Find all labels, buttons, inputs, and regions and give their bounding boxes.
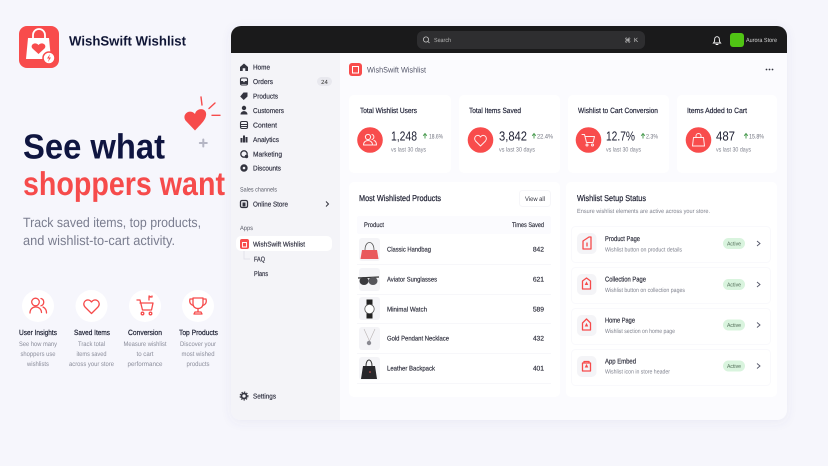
- panel: most wishlisted products: Most Wishlisted Products: [359, 193, 441, 203]
- button: view all: [520, 190, 550, 206]
- row: classic handbag: [359, 238, 544, 261]
- status row: collection page: Active: [727, 282, 741, 288]
- table header: Times Saved: [512, 222, 544, 229]
- panel: wishlist setup status: Wishlist Setup Status: [577, 193, 646, 203]
- panel: most wishlisted products: [349, 182, 560, 397]
- status row: home page: Active: [727, 322, 741, 329]
- button: view all: View all: [525, 196, 545, 203]
- icon: shopping bag with heart: [19, 26, 59, 68]
- feature: user insights: wishlists: [26, 361, 50, 368]
- app name: WishSwift Wishlist: [69, 34, 186, 48]
- search field: [417, 31, 645, 49]
- feature: user insights: [19, 290, 58, 368]
- search field: K: [634, 37, 638, 44]
- nav: marketing: Marketing: [253, 150, 282, 158]
- row: aviator sunglasses: [358, 268, 544, 291]
- nav: products: Products: [253, 92, 278, 100]
- feature: user insights: See how many: [19, 341, 58, 348]
- more menu: [766, 69, 773, 70]
- store name: Aurora Store: [746, 37, 778, 44]
- headline: shoppers want: [23, 165, 225, 202]
- status row: collection page: Collection Page: [605, 276, 646, 284]
- row: classic handbag: 842: [533, 246, 544, 254]
- feature: saved items: Saved Items: [74, 328, 110, 337]
- feature: user insights: shoppers use: [20, 351, 56, 358]
- feature: user insights: User Insights: [19, 328, 57, 337]
- badge: orders count: 24: [321, 79, 328, 86]
- row: aviator sunglasses: 621: [533, 276, 544, 284]
- status row: product page: Wishlist button on product details: [605, 246, 682, 254]
- subheading: and wishlist-to-cart activity.: [23, 233, 175, 248]
- nav: marketing: [241, 150, 282, 158]
- label: sales channels: Sales channels: [240, 186, 277, 194]
- feature: saved items: items saved: [76, 351, 107, 358]
- nav: online store: Online Store: [253, 200, 288, 208]
- badge: orders count: [317, 77, 332, 86]
- icon: users: [30, 298, 46, 313]
- store avatar: [730, 33, 744, 47]
- stat card: items added to cart: Items Added to Cart: [687, 106, 748, 115]
- nav: analytics: [240, 136, 279, 144]
- stat card: items added to cart: 487: [716, 128, 735, 144]
- row: minimal watch: Minimal Watch: [387, 306, 427, 314]
- status row: product page: Active: [727, 240, 741, 248]
- table header: [357, 216, 551, 234]
- row: gold pendant necklace: Gold Pendant Necklace: [387, 336, 449, 342]
- headline: See what: [23, 128, 165, 166]
- row: leather backpack: 401: [533, 366, 544, 372]
- feature: top products: Top Products: [179, 328, 218, 337]
- status row: collection page: [572, 268, 770, 304]
- status row: collection page: Wishlist button on collection pages: [605, 287, 685, 294]
- stat card: wishlist to cart conversion: [568, 95, 669, 173]
- feature: top products: [179, 290, 218, 368]
- panel: wishlist setup status: Ensure wishlist elements are active across your store.: [577, 208, 710, 215]
- subheading: Track saved items, top products,: [23, 215, 201, 230]
- nav: products: [240, 92, 278, 100]
- row: classic handbag: Classic Handbag: [387, 246, 431, 254]
- stat card: total items saved: [459, 95, 560, 173]
- nav: analytics: Analytics: [253, 136, 279, 144]
- status row: home page: [572, 308, 770, 344]
- feature: conversion: [124, 290, 167, 368]
- sidebar: [231, 53, 340, 420]
- nav: plans: Plans: [254, 270, 268, 278]
- row: gold pendant necklace: [359, 327, 544, 350]
- nav: settings: Settings: [253, 392, 276, 400]
- stat card: total wishlist users: vs last 30 days: [391, 146, 426, 154]
- feature: conversion: performance: [128, 361, 163, 368]
- status row: product page: [572, 226, 770, 262]
- nav: discounts: Discounts: [253, 164, 281, 172]
- stat card: wishlist to cart conversion: Wishlist to Cart Conversion: [578, 106, 658, 115]
- nav: orders: Orders: [253, 78, 273, 86]
- nav: online store: [240, 200, 328, 208]
- status row: home page: Wishlist section on home page: [605, 328, 676, 335]
- status row: home page: Home Page: [605, 318, 635, 324]
- nav: content: [240, 122, 277, 130]
- nav: active app wishswift wishlist: [236, 236, 332, 251]
- feature: top products: most wished: [182, 351, 215, 358]
- search field: Search: [434, 37, 451, 44]
- row: leather backpack: Leather Backpack: [387, 366, 436, 372]
- stat card: total wishlist users: 18.6%: [429, 134, 443, 140]
- stat card: items added to cart: 15.8%: [749, 134, 764, 140]
- headline: [23, 128, 225, 202]
- stat card: total items saved: 22.4%: [537, 134, 553, 140]
- stat card: wishlist to cart conversion: 12.7%: [606, 128, 635, 144]
- nav: orders: [240, 78, 273, 86]
- nav: customers: [240, 106, 284, 115]
- icon: trophy: [190, 298, 206, 314]
- nav: settings: [240, 392, 276, 400]
- status row: app embed: App Embed: [605, 358, 636, 366]
- row: minimal watch: [359, 297, 544, 320]
- row: gold pendant necklace: 432: [533, 336, 544, 342]
- label: apps: Apps: [240, 225, 253, 232]
- feature: saved items: Track total: [78, 341, 105, 348]
- nav: home: [240, 64, 270, 72]
- icon: heart: [84, 300, 99, 314]
- stat card: total wishlist users: [349, 95, 451, 173]
- feature: conversion: Conversion: [128, 328, 162, 337]
- decoration: heart with sparks: [184, 97, 220, 146]
- subheading: [23, 215, 201, 248]
- brand logo and name: [19, 26, 186, 68]
- nav: customers: Customers: [253, 108, 284, 115]
- status row: product page: Product Page: [605, 235, 640, 243]
- feature: top products: Discover your: [180, 341, 217, 348]
- row: leather backpack: [359, 357, 544, 380]
- icon: bell: [714, 37, 720, 44]
- app window: [231, 26, 787, 420]
- status row: app embed: Wishlist icon in store header: [605, 368, 670, 376]
- nav: home: Home: [253, 64, 270, 72]
- nav: active app wishswift wishlist: WishSwift Wishlist: [253, 240, 305, 248]
- stat card: items added to cart: vs last 30 days: [716, 146, 751, 154]
- stat card: total items saved: Total Items Saved: [469, 106, 521, 115]
- top bar: [231, 26, 787, 53]
- row: aviator sunglasses: Aviator Sunglasses: [387, 276, 438, 284]
- stat card: total wishlist users: Total Wishlist Users: [360, 106, 417, 115]
- stat card: wishlist to cart conversion: 2.3%: [646, 134, 658, 140]
- stat card: items added to cart: [677, 95, 777, 173]
- panel: wishlist setup status: [566, 182, 777, 397]
- table header: Product: [364, 222, 384, 229]
- feature: saved items: [69, 290, 114, 368]
- feature: top products: products: [186, 361, 210, 368]
- nav: faq: FAQ: [254, 256, 265, 264]
- feature: saved items: across your store: [69, 361, 114, 368]
- feature: conversion: to cart: [136, 351, 154, 358]
- stat card: total items saved: 3,842: [499, 128, 527, 144]
- status row: app embed: Active: [727, 363, 741, 370]
- status row: app embed: [572, 350, 770, 386]
- stat card: total items saved: vs last 30 days: [499, 146, 535, 154]
- nav: discounts: [240, 164, 281, 172]
- row: minimal watch: 589: [533, 306, 544, 314]
- search field: ⌘: [624, 36, 631, 44]
- stat card: wishlist to cart conversion: vs last 30 days: [606, 146, 641, 154]
- nav: content: Content: [253, 122, 277, 130]
- icon: cart with arrow: [137, 296, 153, 315]
- feature: conversion: Measure wishlist: [124, 341, 167, 348]
- page header: [349, 63, 773, 76]
- stat card: total wishlist users: 1,248: [391, 128, 417, 144]
- page header: WishSwift Wishlist: [367, 65, 427, 74]
